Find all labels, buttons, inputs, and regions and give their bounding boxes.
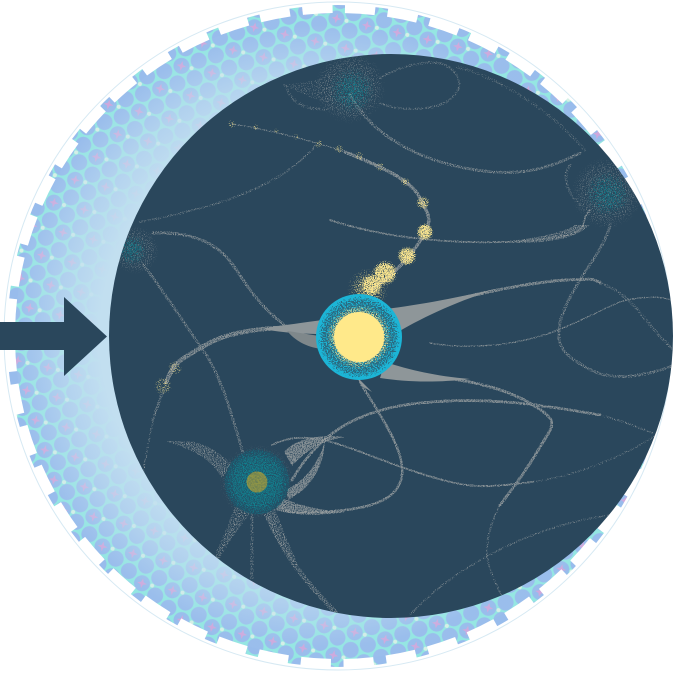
axon beads bbox=[154, 120, 430, 395]
soma: faint left neuron bbox=[120, 227, 158, 273]
faint stippled neurites bbox=[140, 63, 672, 615]
soma: lower left neuron bbox=[219, 444, 295, 520]
arrow pointing right bbox=[0, 297, 107, 376]
neuron network bbox=[140, 63, 672, 615]
soma: central firing neuron bbox=[316, 294, 402, 380]
bright stippled neurites bbox=[166, 124, 600, 512]
panel: dark nucleus circle bbox=[109, 54, 673, 618]
soma: faint right neuron bbox=[572, 158, 640, 228]
main axon bbox=[345, 152, 429, 290]
soma: faint top neuron bbox=[314, 52, 386, 124]
glowing signal pulses along axon bbox=[347, 223, 434, 310]
tapered dendrite bases bbox=[262, 288, 500, 392]
